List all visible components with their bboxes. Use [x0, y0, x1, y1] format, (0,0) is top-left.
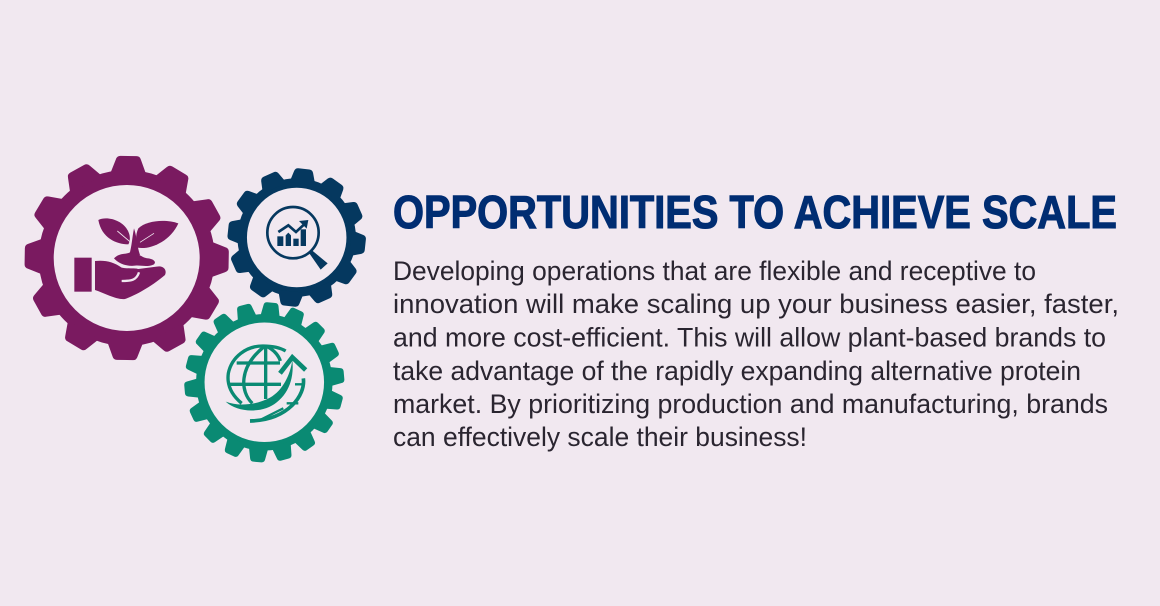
body text: innovation will make scaling up your business easier, faster,: [393, 289, 1119, 319]
body text: and more cost-efficient. This will allow plant-based brands to: [393, 322, 1106, 352]
body text: take advantage of the rapidly expanding alternative protein: [393, 356, 1081, 386]
gear: navy with chart magnifier icon: [227, 168, 367, 307]
icon: globe with rising arrow: [226, 346, 306, 421]
gear: purple with plant in hand icon: [24, 156, 229, 360]
body text: can effectively scale their business!: [393, 422, 807, 452]
icon: magnifier with bar chart: [267, 207, 328, 270]
body text: Developing operations that are flexible and receptive to: [393, 256, 1036, 286]
icon: plant in hand: [74, 218, 178, 299]
body text: market. By prioritizing production and manufacturing, brands: [393, 389, 1108, 419]
gear: green with globe icon: [184, 302, 345, 463]
body text: [393, 256, 1119, 452]
